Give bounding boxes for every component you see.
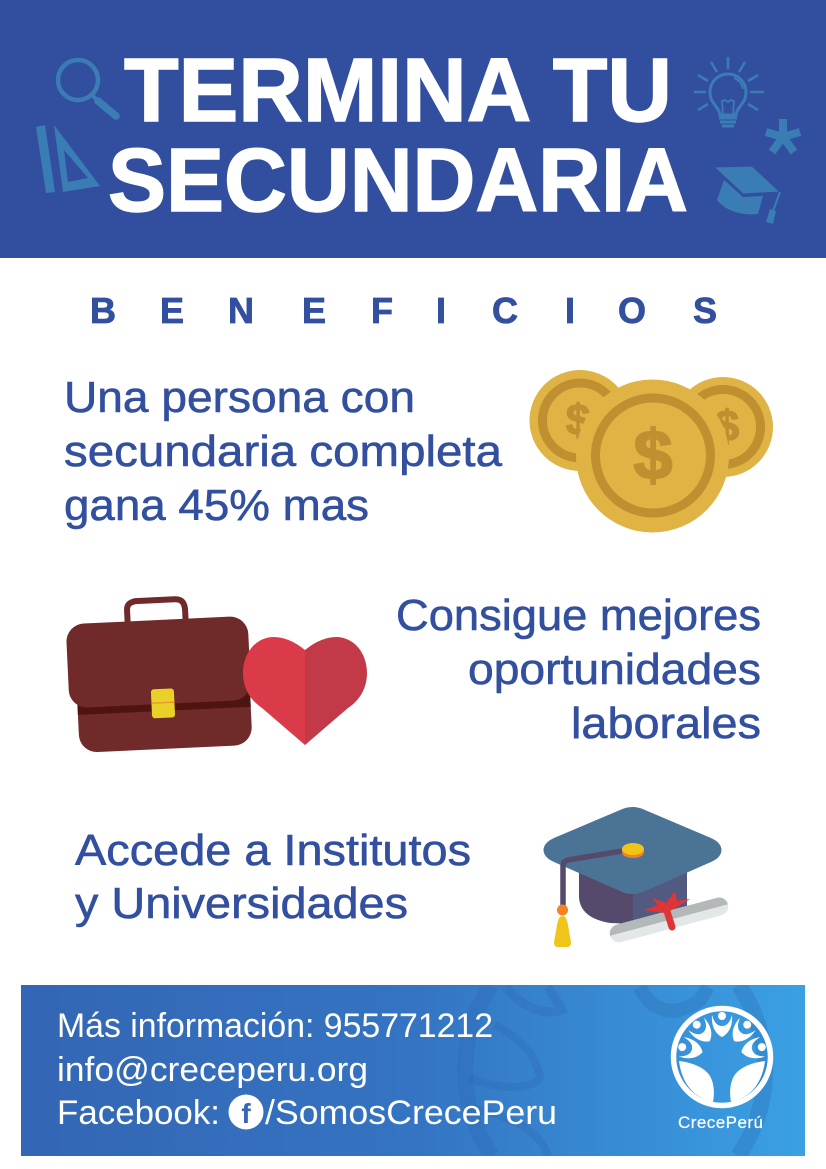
icon: facebook [228,1094,264,1130]
contact text: Más información: 955771212 [57,1007,493,1045]
icon: briefcase [65,596,254,753]
icon: coins: $ [634,416,672,494]
text: benefit 2: laborales [571,699,761,748]
icon: light bulb [694,57,764,126]
icon: coins: $ [566,396,590,445]
contact text: /SomosCrecePeru [265,1094,557,1132]
text: benefit 3: Accede a Institutos [75,826,471,875]
text: benefit 1: gana 45% mas [64,481,369,530]
title: TERMINA TU [124,41,672,141]
icon: graduation cap [714,166,780,224]
logo: CrecePerú [674,1008,770,1132]
icon: facebook: f [241,1098,251,1129]
text: benefit 2 [396,591,761,748]
watermark logo [465,985,765,1156]
icon: heart [243,637,367,745]
contact text: Facebook: [57,1094,220,1132]
text: benefit 2: Consigue mejores [396,591,761,640]
text: benefit 2: oportunidades [468,645,761,694]
panel: contact footer [21,985,805,1156]
contact text [57,1007,557,1132]
icon: ruler and set square [36,125,100,193]
text: benefit 1 [64,373,503,530]
heading: beneficios: BENEFICIOS [90,290,717,331]
logo: CrecePerú: CrecePerú [678,1113,763,1132]
icon: coins [530,370,773,532]
title [108,41,688,231]
text: benefit 1: Una persona con [64,373,415,422]
icon: graduation cap and diploma [544,807,730,947]
panel: header [0,0,826,258]
icon: magnifier [58,60,116,116]
icon: coins: $ [715,402,739,451]
text: benefit 3 [75,826,471,928]
contact text: info@creceperu.org [57,1051,368,1089]
title: SECUNDARIA [108,131,688,231]
text: benefit 1: secundaria completa [64,427,503,476]
icon: asterisk [766,119,800,152]
text: benefit 3: y Universidades [75,879,408,928]
